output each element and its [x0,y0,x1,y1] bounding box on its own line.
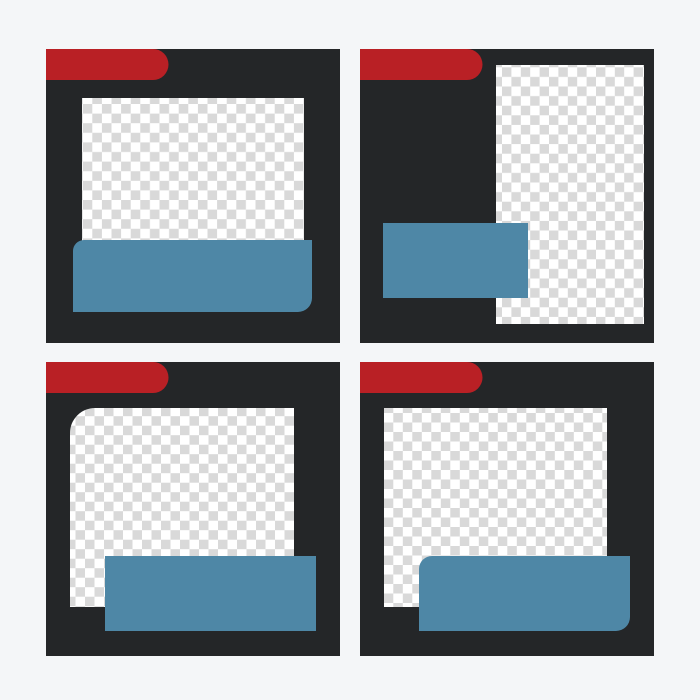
image placeholder bottom right [384,408,607,607]
image placeholder top right [496,65,644,324]
blue caption box top left [73,240,312,312]
red tab bottom left [46,362,168,393]
panel: template top right [360,49,654,343]
red tab top right [360,49,482,80]
image placeholder top left [82,98,304,242]
blue caption box bottom left [105,556,316,631]
blue caption box top right [383,223,528,298]
image placeholder bottom left [70,408,294,607]
panel: template bottom left [46,362,340,656]
red tab top left [46,49,168,80]
blue caption box bottom right [419,556,630,631]
panel: template top left [46,49,340,343]
red tab bottom right [360,362,482,393]
panel: template bottom right [360,362,654,656]
